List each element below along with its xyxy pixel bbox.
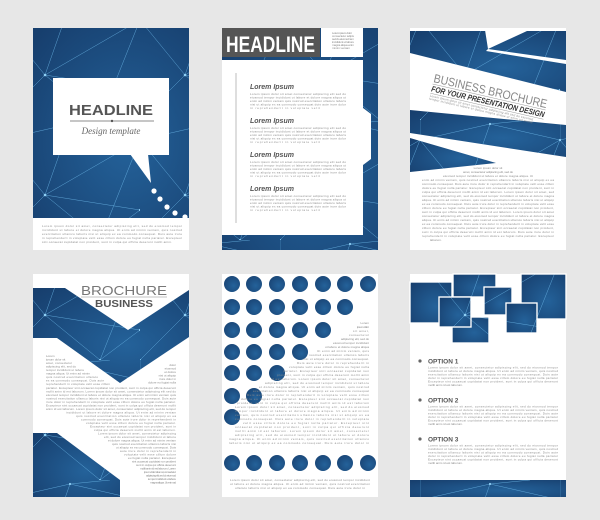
content panel: Lorem ipsum dolor sit amet consectetur adipiscing elit sed do bbox=[250, 160, 346, 164]
body text: aliqua. Ut enim ad minim veniam, quis nostrud exercitation ullamco laboris nisi ut aliquip bbox=[422, 198, 554, 202]
body text: irure dolor in reprehenderit in voluptate velit esse cillum dolore eu fugiat nulla pariatur. bbox=[46, 400, 176, 404]
diagonal text block: laboris nisi ut aliquip ex ea commodo consequat. Duis aute irure dolor in bbox=[229, 441, 369, 445]
diagonal text block: tempor incididunt ut labore et dolore magna aliqua. Ut enim ad minim bbox=[235, 409, 370, 413]
option 1: mollit anim id est laborum. bbox=[428, 383, 463, 387]
option 1 bbox=[418, 358, 558, 387]
content panel: in reprehenderit in voluptate velit bbox=[250, 174, 320, 178]
body text: eiusmod bbox=[165, 366, 176, 370]
option 3: OPTION 3 bbox=[428, 436, 459, 444]
diagonal text block: Lorem ipsum dolor sit amet, consectetur adipiscing elit, sed do eiusmod bbox=[235, 405, 369, 409]
diagonal text block: Ut enim ad minim veniam, quis bbox=[317, 349, 370, 353]
body text: ex ea commodo consequat. Duis aute bbox=[46, 378, 104, 382]
body text: ipsum dolor sit amet, consectetur bbox=[144, 470, 176, 474]
diagonal text block: proident, sunt in culpa qui officia deserunt mollit anim bbox=[277, 373, 370, 377]
body text: voluptate velit esse cillum dolore bbox=[124, 452, 176, 456]
diagonal text block: mollit anim id est laborum. Lorem ipsum dolor sit amet, consectetur bbox=[235, 429, 369, 433]
body text: quis nostrud exercitation ullamco laboris nisi bbox=[112, 442, 176, 446]
diagonal text block bbox=[229, 321, 370, 445]
content panel: Lorem Ipsum bbox=[250, 186, 294, 193]
content panel: Lorem ipsum dolor sit amet consectetur adipiscing elit sed do bbox=[250, 92, 346, 96]
option 2: exercitation ullamco laboris nisi ut aliquip ex ea commodo consequat. Duis aute bbox=[428, 412, 558, 416]
content panel: eiusmod tempor incididunt ut labore et dolore magna aliqua ut bbox=[250, 96, 346, 100]
panel: brochure 3 business brochure bbox=[410, 28, 566, 250]
body text: quis nostrud exercitation ullamco laboris nisi ut aliquip ex ea bbox=[76, 414, 176, 418]
body text: elit, sed do eiusmod tempor incididunt ut labore bbox=[104, 435, 176, 439]
body text: exercitation ullamco laboris nisi ut aliquip ex ea commodo consequat. Duis aute irure bbox=[42, 232, 182, 236]
body text: Lorem bbox=[46, 354, 55, 358]
body text: commodo consequat. Duis aute irure dolor in reprehenderit in voluptate velit esse cillum bbox=[422, 182, 554, 186]
body text: cillum dolore eu fugiat nulla pariatur. Excepteur sint occaecat cupidatat non proident, bbox=[422, 226, 554, 230]
body text: sunt in culpa qui officia deserunt mollit anim id est laborum. Lorem ipsum dolor sit amet bbox=[422, 210, 554, 214]
content panel: enim ad minim veniam quis nostrud exercitation ullamco laboris bbox=[250, 167, 346, 171]
content panel: Lorem Ipsum bbox=[250, 152, 294, 159]
body text: sunt in culpa qui officia deserunt bbox=[136, 463, 176, 467]
body text: in reprehenderit in voluptate velit esse cillum dolore eu fugiat nulla pariatur. Excepteur bbox=[42, 236, 182, 240]
dots bbox=[151, 188, 188, 220]
header bar: consectetur adipis bbox=[332, 34, 354, 38]
content panel: nisi ut aliquip ex ea commodo consequat duis aute irure dolor bbox=[250, 204, 346, 208]
option 3: Excepteur sint occaecat cupidatat non proident, sunt in culpa qui officia deserunt bbox=[428, 458, 558, 462]
option 2: dolor in reprehenderit in voluptate velit esse cillum dolore eu fugiat nulla pariatur bbox=[428, 415, 558, 419]
body text: sint occaecat cupidatat non proident, sunt in culpa qui officia deserunt mollit anim. bbox=[42, 240, 172, 244]
diagonal text block: adipiscing elit, sed do bbox=[341, 337, 369, 341]
body text: ex ea commodo consequat. Duis aute irure dolor in reprehenderit in voluptate velit esse bbox=[422, 222, 554, 226]
body text bbox=[422, 166, 554, 242]
diagonal text block: occaecat cupidatat non proident, sunt in culpa qui officia deserunt bbox=[235, 425, 369, 429]
option 1: Excepteur sint occaecat cupidatat non proident, sunt in culpa qui officia deserunt bbox=[428, 380, 558, 384]
body text: dolore eu fugiat nulla pariatur. Excepteur sint occaecat cupidatat non proident, sunt in bbox=[422, 186, 554, 190]
panel: brochure 1 headline speech bubble bbox=[33, 28, 189, 250]
body text: amet, consectetur bbox=[46, 361, 72, 365]
diagonal text block: eiusmod tempor incididunt bbox=[333, 341, 369, 345]
rotated title: Lorem ipsum dolor sit amet consectetur adipiscing elit sed do eiusmod bbox=[429, 94, 534, 122]
diagonal text block: sit amet, bbox=[353, 329, 369, 333]
speech bubble box bbox=[53, 78, 169, 183]
body text: magna aliqua. Ut enim ad bbox=[150, 480, 176, 484]
diagonal text block: adipiscing elit, sed do eiusmod tempor incididunt ut labore bbox=[265, 381, 369, 385]
content panel: nisi ut aliquip ex ea commodo consequat duis aute irure dolor bbox=[250, 136, 346, 140]
body text: quis nostrud exercitation ullamco bbox=[46, 375, 98, 379]
header bar: HEADLINE bbox=[226, 32, 315, 57]
rotated title bbox=[429, 71, 549, 127]
content panel: eiusmod tempor incididunt ut labore et dolore magna aliqua ut bbox=[250, 164, 346, 168]
title bbox=[81, 283, 167, 310]
rotated title: FOR YOUR PRESENTATION DESIGN bbox=[430, 84, 546, 119]
body text: laborum. bbox=[430, 238, 442, 242]
diagonal text block: proident, sunt in culpa qui officia deserunt mollit anim id est laborum bbox=[237, 401, 370, 405]
content panel: Lorem Ipsum bbox=[250, 118, 294, 125]
content panel: nisi ut aliquip ex ea commodo consequat duis aute irure dolor bbox=[250, 170, 346, 174]
header bar: magna aliqua enim bbox=[332, 43, 354, 47]
diagonal text block: adipiscing elit, sed do eiusmod tempor incididunt ut labore et dolore bbox=[235, 433, 369, 437]
rotated title: BUSINESS BROCHURE bbox=[432, 71, 549, 111]
header bar: incididunt ut labore bbox=[332, 40, 354, 44]
option 2: Excepteur sint occaecat cupidatat non proident, sunt in culpa qui officia deserunt bbox=[428, 418, 558, 422]
body text: voluptate velit esse cillum dolore eu fugiat nulla pariatur. bbox=[86, 421, 176, 425]
content panel: enim ad minim veniam quis nostrud exercitation ullamco laboris bbox=[250, 99, 346, 103]
body text: mollit anim id est laborum. Lorem bbox=[140, 466, 176, 470]
body text: Lorem ipsum dolor sit amet, consectetur adipiscing bbox=[98, 432, 176, 436]
body text: ut aliquip ex ea commodo consequat. Duis bbox=[116, 446, 176, 450]
diagonal text block: commodo consequat. Duis aute irure dolor in reprehenderit in voluptate bbox=[235, 417, 369, 421]
body text: et dolore bbox=[164, 370, 176, 374]
body text: adipiscing elit, sed do bbox=[46, 364, 76, 368]
body text: commodo consequat. Duis aute irure dolor in reprehenderit in bbox=[81, 418, 176, 422]
option 3: dolor in reprehenderit in voluptate velit esse cillum dolore eu fugiat nulla pariatur bbox=[428, 454, 558, 458]
body text: tempor incididunt ut labore bbox=[148, 477, 176, 481]
option 2: OPTION 2 bbox=[428, 398, 459, 404]
option 3: incididunt ut labore et dolore magna aliqua. Ut enim ad minim veniam, quis nostrud bbox=[428, 447, 558, 451]
body text: eiusmod tempor incididunt ut labore et dolore magna aliqua. Ut enim ad minim veniam quis bbox=[46, 393, 176, 397]
body text: Excepteur sint occaecat cupidatat non proident, sunt in bbox=[90, 424, 176, 428]
rotated title: tempor incididunt ut labore et dolore magna aliqua ut enim ad minim bbox=[429, 97, 533, 124]
content panel: Lorem ipsum dolor sit amet consectetur adipiscing elit sed do bbox=[250, 126, 346, 130]
content panel: enim ad minim veniam quis nostrud exercitation ullamco laboris bbox=[250, 201, 346, 205]
body text: culpa qui officia deserunt mollit anim id est laborum. bbox=[94, 428, 176, 432]
diagonal text block: Duis aute irure dolor in reprehenderit in bbox=[297, 361, 369, 365]
bottom text: Lorem ipsum dolor sit amet, consectetur adipiscing elit, sed do eiusmod tempor incididunt bbox=[230, 478, 370, 482]
body text: nostrud exercitation ullamco laboris nisi ut aliquip ex ea commodo consequat. Duis aute bbox=[46, 396, 176, 400]
bottom corner shape bbox=[33, 433, 120, 497]
diagonal text block: consectetur bbox=[349, 333, 369, 337]
content panel: enim ad minim veniam quis nostrud exercitation ullamco laboris bbox=[250, 133, 346, 137]
title: BROCHURE bbox=[81, 283, 167, 298]
panel: brochure 2 headline list bbox=[222, 28, 378, 250]
content panel: Lorem ipsum dolor sit amet consectetur adipiscing elit sed do bbox=[250, 194, 346, 198]
body text: dolor bbox=[169, 363, 176, 367]
option 1: dolor in reprehenderit in voluptate velit esse cillum dolore eu fugiat nulla pariatur bbox=[428, 376, 558, 380]
body text: culpa qui officia deserunt mollit anim id est laborum. Lorem ipsum dolor sit amet, sed bbox=[422, 190, 554, 194]
diagonal text block: voluptate velit esse cillum dolore eu fugiat nulla bbox=[289, 365, 369, 369]
option 2: incididunt ut labore et dolore magna aliqua. Ut enim ad minim veniam, quis nostrud bbox=[428, 408, 558, 412]
body text: et dolore magna aliqua. Ut enim ad minim veniam bbox=[108, 438, 176, 442]
option 1: exercitation ullamco laboris nisi ut aliquip ex ea commodo consequat. Duis aute bbox=[428, 372, 558, 376]
content panel: eiusmod tempor incididunt ut labore et dolore magna aliqua ut bbox=[250, 198, 346, 202]
headline text: HEADLINE bbox=[69, 102, 153, 119]
diagonal text block: Lorem bbox=[360, 321, 369, 325]
body text: aute irure dolor in reprehenderit in bbox=[120, 449, 176, 453]
content panel: Lorem Ipsum bbox=[250, 84, 294, 91]
body text: anim id est laborum. Lorem ipsum dolor sit amet, consectetur adipiscing elit, sed do tempor bbox=[46, 407, 176, 411]
body text: incididunt ut labore et dolore magna aliqua. Ut enim ad minim veniam bbox=[66, 410, 176, 414]
header bar: minim veniam bbox=[332, 46, 350, 50]
content panel: eiusmod tempor incididunt ut labore et dolore magna aliqua ut bbox=[250, 130, 346, 134]
option 1: OPTION 1 bbox=[428, 358, 459, 366]
content panel bbox=[222, 60, 371, 235]
body text: consectetur adipiscing elit, sed do eiusmod tempor incididunt ut labore et dolore magna bbox=[422, 214, 554, 218]
option 1: incididunt ut labore et dolore magna aliqua. Ut enim ad minim veniam, quis nostrud bbox=[428, 369, 558, 373]
body text: nisi ut aliquip bbox=[159, 374, 176, 378]
option 3: exercitation ullamco laboris nisi ut aliquip ex ea commodo consequat. Duis aute bbox=[428, 450, 558, 454]
diagonal text block: nisi ut aliquip ex ea commodo consequat. bbox=[303, 357, 369, 361]
option 3: mollit anim id est laborum. bbox=[428, 461, 463, 465]
bottom text bbox=[230, 478, 370, 490]
squares collage bbox=[410, 274, 566, 343]
diagonal text block: velit esse cillum dolore eu fugiat nulla pariatur. Excepteur sint bbox=[243, 421, 369, 425]
diagonal text block: veniam, quis nostrud exercitation ullamco laboris nisi ut aliquip ex ea bbox=[235, 413, 369, 417]
diagonal text block: pariatur. Excepteur sint occaecat cupidatat non bbox=[283, 369, 369, 373]
option 3: Lorem ipsum dolor sit amet, consectetur adipiscing elit, sed do eiusmod tempor bbox=[428, 444, 558, 448]
body text: cillum dolore eu fugiat nulla pariatur. Excepteur sint occaecat cupidatat non proident, bbox=[422, 206, 554, 210]
header bar bbox=[222, 28, 363, 57]
diagonal text block: id est laborum. Lorem ipsum dolor sit amet, consectetur bbox=[271, 377, 369, 381]
body text bbox=[46, 354, 176, 484]
diagonal text block: exercitation ullamco laboris nisi ut aliquip ex ea commodo consequat bbox=[253, 389, 369, 393]
header bar: Lorem ipsum dolor bbox=[332, 31, 352, 35]
diagonal text block: Duis aute irure dolor in reprehenderit in voluptate velit esse cillum bbox=[247, 393, 370, 397]
diagonal text block: ut labore et dolore magna aliqua bbox=[325, 345, 369, 349]
body text: ipsum dolor sit bbox=[46, 358, 66, 362]
title: BUSINESS bbox=[95, 299, 153, 310]
diagonal text block: nostrud exercitation ullamco laboris bbox=[309, 353, 370, 357]
diagonal bands bbox=[410, 30, 566, 172]
body text: enim ad minim veniam, quis nostrud exercitation ullamco laboris nisi ut aliquip ex ea bbox=[422, 178, 554, 182]
body text: amet, consectetur adipiscing elit, sed do bbox=[463, 170, 513, 174]
body text: irure dolor in bbox=[159, 377, 176, 381]
body text bbox=[42, 224, 182, 244]
body text: pariatur. Excepteur sint occaecat cupidatat non proident, sunt in culpa qui officia deserunt bbox=[46, 386, 176, 390]
body text: adipiscing elit, sed do eiusmod bbox=[146, 474, 176, 478]
panel: brochure 5 dot grid bbox=[222, 274, 378, 497]
body text: sunt in culpa qui officia deserunt mollit anim id est laborum. Duis aute irure dolor in bbox=[422, 230, 554, 234]
body text: incididunt ut labore et dolore magna aliqua. Ut enim ad minim veniam, quis nostrud bbox=[42, 228, 182, 232]
body text: tempor incididunt ut labore bbox=[46, 368, 84, 372]
body text: eu fugiat nulla pariatur. Excepteur bbox=[128, 456, 176, 460]
body text: Lorem ipsum dolor sit amet, consectetur adipiscing elit, sed do eiusmod tempor bbox=[42, 224, 182, 228]
body text: reprehenderit in voluptate velit esse cillum bbox=[46, 382, 110, 386]
body text: consectetur adipiscing elit, sed do eiusmod tempor incididunt ut labore et dolore magna bbox=[422, 194, 554, 198]
subtitle: Design template bbox=[81, 126, 140, 136]
diagonal text block: ipsum dolor bbox=[357, 325, 369, 329]
bottom text: ullamco laboris nisi ut aliquip ex ea commodo consequat. Duis aute irure dolor in bbox=[235, 486, 365, 490]
body text: aliqua. Ut enim ad minim veniam, quis nostrud exercitation ullamco laboris nisi ut aliquip bbox=[422, 218, 554, 222]
content panel: in reprehenderit in voluptate velit bbox=[250, 208, 320, 212]
body text: mollit anim id est laborum. Lorem ipsum dolor sit amet, consectetur adipiscing elit sed do bbox=[46, 390, 176, 394]
option 2: Lorem ipsum dolor sit amet, consectetur adipiscing elit, sed do eiusmod tempor bbox=[428, 404, 558, 408]
diagonal text block: et dolore magna aliqua. Ut enim ad minim veniam, quis nostrud bbox=[259, 385, 369, 389]
content panel: in reprehenderit in voluptate velit bbox=[250, 140, 320, 144]
option 2: mollit anim id est laborum. bbox=[428, 422, 463, 426]
content panel: in reprehenderit in voluptate velit bbox=[250, 106, 320, 110]
option 3 bbox=[418, 436, 558, 465]
panel: brochure 4 brochure business bbox=[33, 274, 189, 497]
header bar: sed do eiusmod tem bbox=[332, 37, 354, 41]
body text: dolore eu fugiat nulla bbox=[148, 380, 176, 384]
option 1: Lorem ipsum dolor sit amet, consectetur adipiscing elit, sed do eiusmod tempor bbox=[428, 366, 558, 370]
bottom text: ut labore et dolore magna aliqua. Ut enim ad minim veniam, quis nostrud exercitation bbox=[230, 482, 370, 486]
bottom blue strip bbox=[410, 480, 566, 497]
content panel: nisi ut aliquip ex ea commodo consequat duis aute irure dolor bbox=[250, 102, 346, 106]
dot grid bbox=[224, 276, 376, 471]
body text: ex ea commodo consequat. Duis aute irure dolor in reprehenderit in voluptate velit esse bbox=[422, 202, 554, 206]
body text: eiusmod tempor incididunt ut labore et dolore magna aliqua. Ut bbox=[443, 174, 533, 178]
panel: brochure 6 options bbox=[410, 274, 566, 497]
body text: sint occaecat cupidatat non proident bbox=[132, 460, 176, 464]
diagonal text block: dolore eu fugiat nulla pariatur. Excepteur sint occaecat cupidatat non bbox=[241, 397, 369, 401]
body text: reprehenderit in voluptate velit esse cillum dolore eu fugiat nulla pariatur. Excepteur bbox=[422, 234, 554, 238]
option 2 bbox=[418, 398, 558, 426]
body text: Excepteur sint occaecat cupidatat non proident, sunt in culpa qui officia deserunt mollit bbox=[46, 404, 176, 408]
body text: Lorem ipsum dolor sit bbox=[474, 166, 502, 170]
body text: magna aliqua. Ut enim ad minim bbox=[46, 372, 90, 376]
blue V shape bbox=[33, 288, 189, 383]
diagonal text block: magna aliqua. Ut enim ad minim veniam, quis nostrud exercitation ullamco bbox=[229, 437, 369, 441]
